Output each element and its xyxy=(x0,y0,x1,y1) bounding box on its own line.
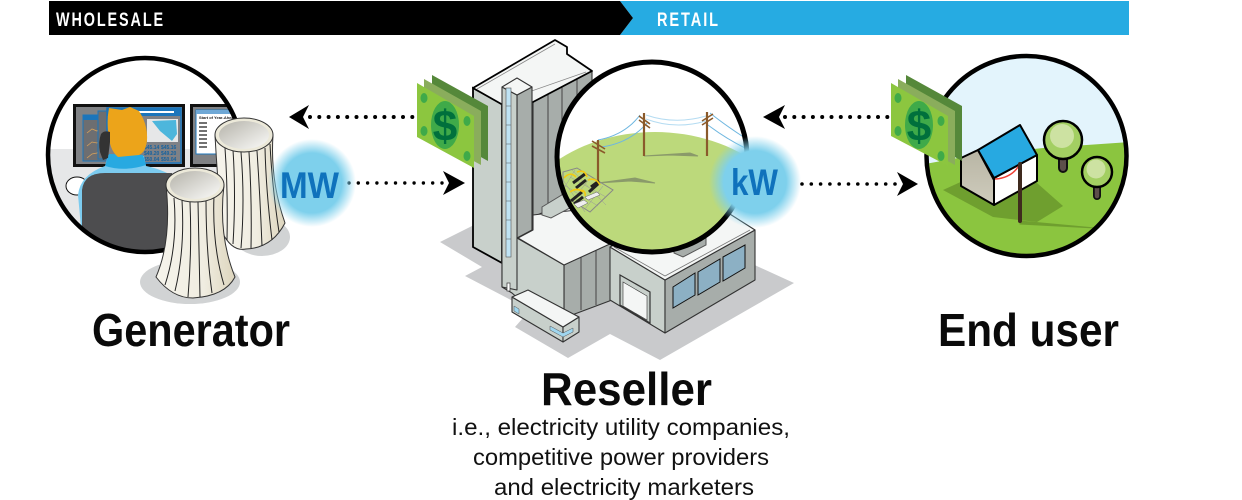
tree small xyxy=(1082,157,1112,196)
tall tower xyxy=(473,40,592,263)
operator xyxy=(78,107,172,250)
retail label: RETAIL xyxy=(657,10,720,31)
arrow: payment to reseller xyxy=(763,105,890,129)
callout: MW xyxy=(268,139,356,227)
roof vents xyxy=(542,190,706,257)
front tower xyxy=(140,168,240,304)
callout: MW: MW xyxy=(280,165,339,206)
back tower xyxy=(215,118,290,256)
left monitor: $49.20 xyxy=(144,151,160,157)
left monitor: $45.14 xyxy=(144,145,160,151)
house shadow xyxy=(943,180,1063,222)
header band: wholesale to retail xyxy=(49,1,1129,35)
left monitor: $50.04 xyxy=(161,157,177,163)
right monitor xyxy=(190,104,232,167)
panel: transmission lines circle xyxy=(554,60,750,254)
building shadow xyxy=(440,222,794,360)
icon: money stack, reseller xyxy=(417,75,488,168)
heading: Reseller: Reseller xyxy=(541,363,712,415)
retail band xyxy=(620,1,1129,35)
icon: reseller building xyxy=(440,40,794,360)
service column xyxy=(502,78,532,291)
right monitor: Start of Year-Ahead Day xyxy=(199,115,245,120)
left monitor: $45.16 xyxy=(161,145,177,151)
callout: kW xyxy=(709,136,801,228)
left monitor: $50.04 xyxy=(144,157,160,163)
utility poles xyxy=(592,112,713,181)
panel: generator control room circle xyxy=(46,56,237,254)
text block: reseller description: and electricity marketers xyxy=(494,474,754,500)
arrow: payment to generator xyxy=(289,105,415,129)
panel: end user home circle xyxy=(920,56,1130,262)
left monitor: $49.20 xyxy=(161,151,177,157)
heading: End user: End user xyxy=(938,304,1119,356)
dollar sign: $ xyxy=(907,102,931,151)
lower block xyxy=(502,205,620,322)
heading: Generator: Generator xyxy=(92,304,290,356)
dollar sign: $ xyxy=(433,102,457,151)
left monitor xyxy=(73,104,185,167)
office annex xyxy=(610,195,755,333)
ground xyxy=(929,142,1124,254)
icon: money stack, end user xyxy=(891,75,962,166)
icon: cooling towers xyxy=(140,118,290,304)
callout: kW: kW xyxy=(731,162,778,203)
house xyxy=(961,125,1037,205)
wholesale band xyxy=(49,1,633,35)
text block: reseller description: i.e., electricity utility companies, xyxy=(452,414,790,440)
utility pole xyxy=(1018,164,1022,221)
text block: reseller description: competitive power providers xyxy=(473,444,769,470)
power lines xyxy=(598,113,745,148)
hill xyxy=(560,132,740,250)
arrow: megawatts to reseller xyxy=(349,171,465,195)
pole shadows xyxy=(598,153,698,183)
tree large xyxy=(1044,121,1082,168)
substation xyxy=(563,168,613,212)
ground-level unit xyxy=(512,290,579,342)
arrow: kilowatts to end user xyxy=(802,172,918,196)
wholesale label: WHOLESALE xyxy=(56,10,165,31)
text block: reseller description xyxy=(452,414,790,500)
